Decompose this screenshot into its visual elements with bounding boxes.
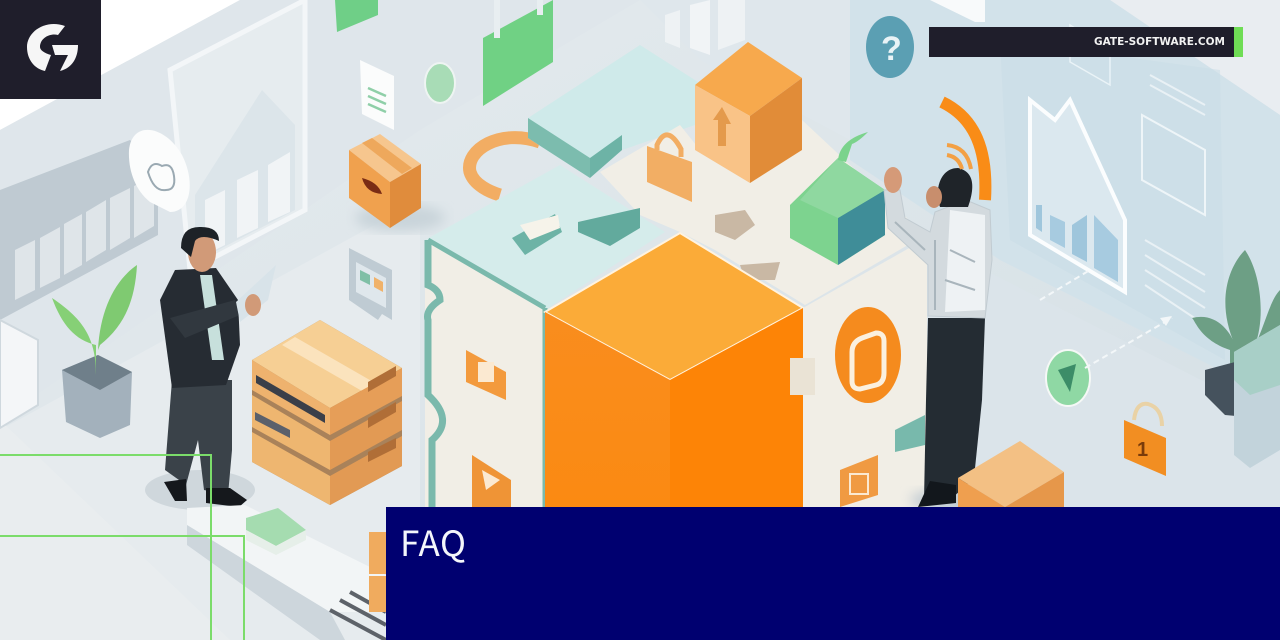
url bar green accent: [1234, 27, 1243, 57]
stack of cardboard boxes left: [252, 320, 402, 505]
man on left: [145, 227, 276, 510]
puzzle block: upper teal piece: [528, 45, 698, 178]
puzzle block: right face: [790, 238, 927, 507]
icon: orange padlock: 1: [1137, 439, 1148, 461]
icon: small padlock: [647, 135, 692, 202]
logo block: [0, 0, 101, 99]
orange box on top: [695, 42, 802, 183]
right corner plant and lock: [1192, 250, 1280, 468]
faq banner: FAQ: [400, 516, 467, 567]
floor tray and small green pack: [187, 505, 386, 640]
faq banner: [386, 507, 1280, 640]
orange wifi arc: [942, 102, 985, 200]
puzzle block: cream right top: [600, 120, 925, 305]
icon: orange arc: [470, 138, 540, 195]
icon: orange padlock: [1124, 404, 1166, 476]
site url bar: GATE-SOFTWARE.COM: [1094, 36, 1225, 48]
icon: green coin with arrow: [1040, 270, 1172, 406]
main orange cube: [545, 233, 803, 507]
decorative frame: green outline box one: [0, 454, 212, 640]
cardboard box by right man: [958, 441, 1064, 507]
floating icons top: [335, 0, 914, 130]
icon: chat bubble: [129, 130, 190, 212]
decorative frame: green outline box two: [0, 535, 245, 640]
potted plant: [52, 265, 137, 438]
puzzle block: main left: [425, 165, 665, 507]
icon: green house: [790, 132, 885, 265]
man on right: [884, 167, 1010, 512]
icon: open orange box: [349, 134, 445, 232]
site url bar: [929, 27, 1234, 57]
icon: signal bubble tablet: [349, 248, 392, 320]
right wall chart panels: [1030, 25, 1205, 325]
floating icons top: ?: [881, 30, 902, 68]
